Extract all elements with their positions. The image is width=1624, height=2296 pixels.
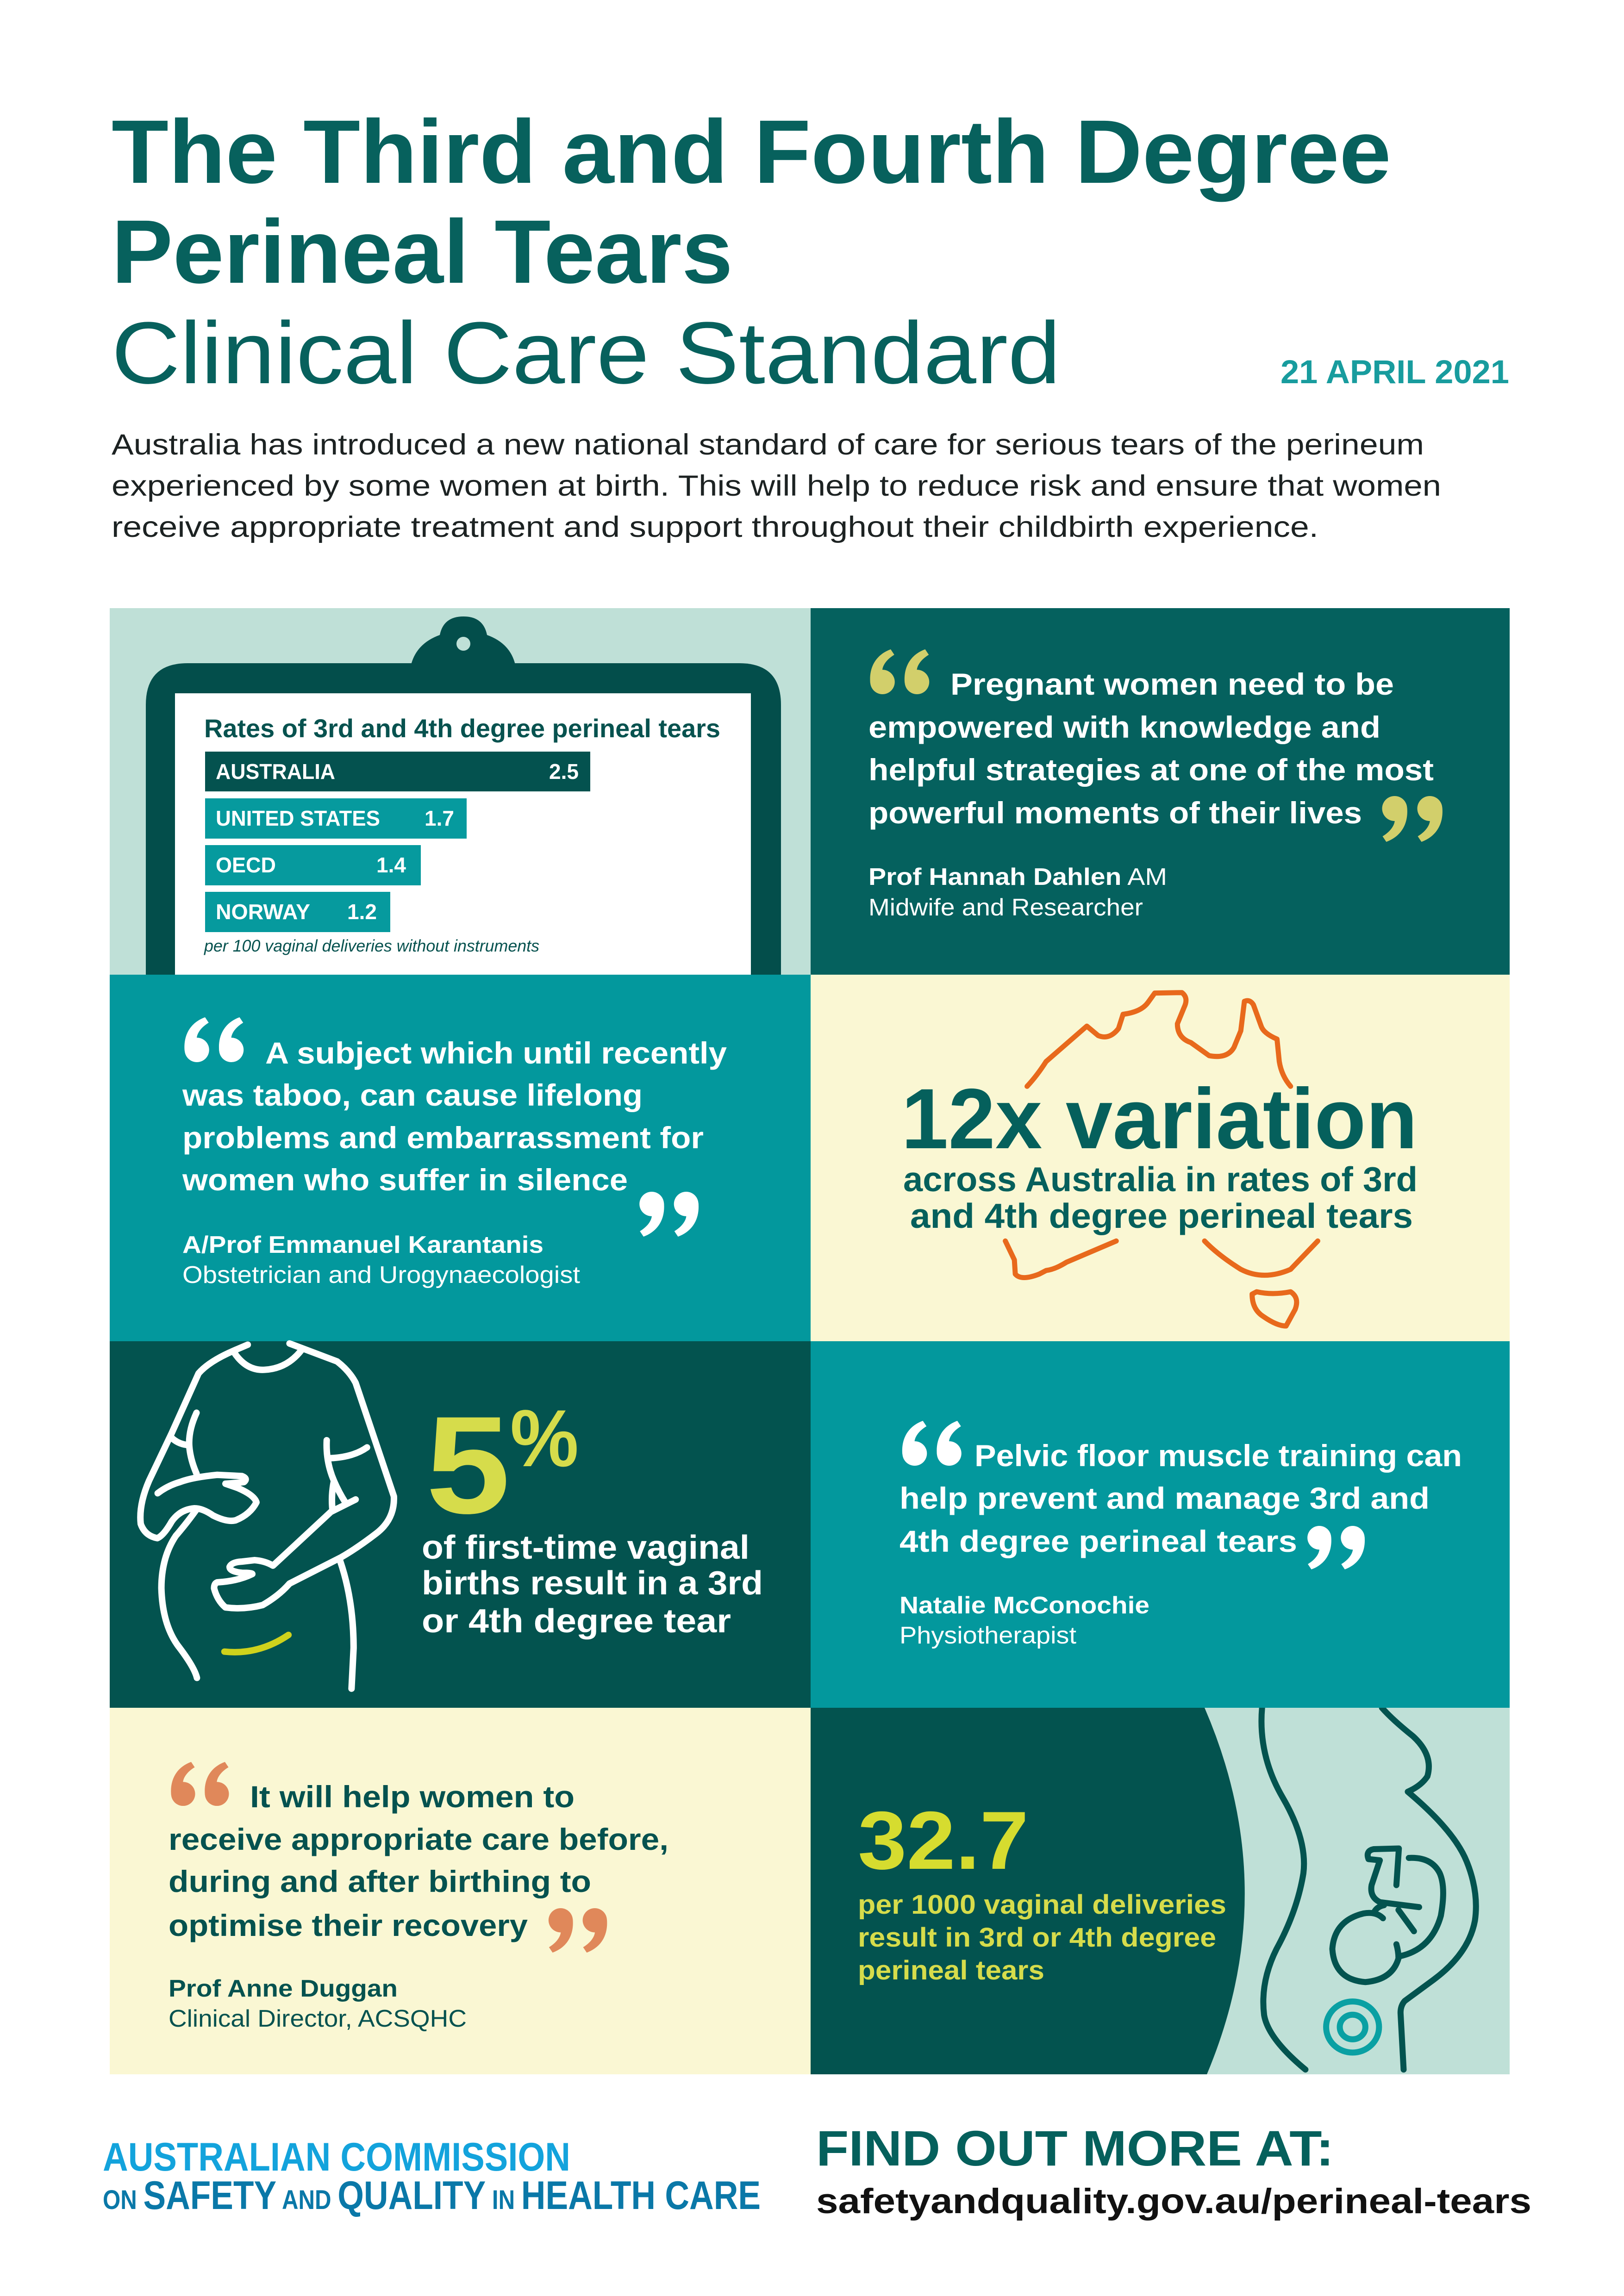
quote text: 4th degree perineal tears [899,1524,1297,1558]
quote text: empowered with knowledge and [868,710,1380,744]
stat caption: of first-time vaginal [422,1529,750,1566]
footnote: per 100 vaginal deliveries without instruments [204,936,539,955]
bar chart: OECD [216,853,276,877]
bar chart: 1.4 [376,853,406,877]
panel: quote Hannah Dahlen [811,608,1510,975]
icon: close quote [1307,1526,1365,1569]
call to action [816,2120,1531,2221]
title: Clinical Care Standard [112,304,1061,402]
bar chart [205,752,590,932]
icon: Australia map outline [1006,993,1318,1326]
quote text [169,1780,668,1942]
intro paragraph [112,429,1441,543]
icon: close quote [1382,796,1443,842]
logo: Australian Commission [103,2135,761,2218]
icon: pregnant belly with fetus [1262,1708,1476,2070]
quote text: help prevent and manage 3rd and [899,1481,1430,1515]
attribution: A/Prof Emmanuel Karantanis [182,1232,543,1258]
quote text: Pregnant women need to be [950,667,1394,701]
quote text: Pelvic floor muscle training can [974,1438,1462,1473]
intro paragraph: receive appropriate treatment and support throughout their childbirth experience. [112,511,1318,543]
quote text [182,1036,727,1197]
panel: quote McConochie [811,1341,1510,1708]
stat caption: perineal tears [858,1955,1044,1985]
intro paragraph: experienced by some women at birth. This will help to reduce risk and ensure that women [112,470,1441,502]
icon: open quote [902,1421,962,1466]
clipboard [146,616,781,975]
bar chart: 2.5 [549,759,579,784]
stat caption: result in 3rd or 4th degree [858,1923,1216,1953]
quote text: women who suffer in silence [182,1163,628,1197]
panel: quote Anne Duggan [110,1708,811,2074]
quote text: during and after birthing to [169,1864,591,1898]
big stat 5% [426,1387,579,1543]
title: Perineal Tears [112,201,733,302]
big stat: 12x variation [901,1071,1418,1167]
stat caption: per 1000 vaginal deliveries [858,1890,1226,1920]
call to action: safetyandquality.gov.au/perineal-tears [816,2182,1531,2221]
title [112,101,1391,402]
attribution: Natalie McConochie [899,1592,1149,1619]
panel: 5% stat [110,1341,811,1708]
quote text: optimise their recovery [169,1908,528,1942]
attribution [169,1975,467,2032]
icon: open quote [171,1762,229,1806]
bar chart: UNITED STATES [216,806,380,830]
intro paragraph: Australia has introduced a new national standard of care for serious tears of the perineum [112,429,1424,461]
stat caption: births result in a 3rd [422,1565,763,1602]
attribution: Physiotherapist [899,1622,1077,1649]
icon: open quote [184,1017,244,1062]
quote text [868,667,1434,830]
stat caption [903,1160,1418,1235]
attribution: Prof Hannah Dahlen AM [868,864,1167,890]
big stat 5%: % [510,1394,579,1484]
icon: open quote [870,649,929,694]
quote text: was taboo, can cause lifelong [182,1078,643,1112]
logo: Australian Commission: ON SAFETY AND QUALITY IN HEALTH CARE [103,2173,761,2218]
big stat 5%: 5 [426,1387,510,1543]
stat caption: and 4th degree perineal tears [910,1196,1413,1235]
icon: close quote [639,1192,699,1237]
bar chart: NORWAY [216,900,310,924]
big stat 32.7: 32.7 [858,1794,1029,1886]
bar chart: AUSTRALIA [216,759,335,784]
quote text [899,1438,1462,1558]
bar chart: 1.2 [347,900,377,924]
bar chart: 1.7 [425,806,454,830]
stat caption [858,1890,1226,1985]
panel: bar chart clipboard [110,608,811,975]
quote text: helpful strategies at one of the most [868,753,1434,787]
attribution [868,864,1167,921]
attribution [899,1592,1149,1649]
date: 21 APRIL 2021 [1280,354,1509,391]
panel: quote Karantanis [110,975,811,1341]
attribution: Prof Anne Duggan [169,1975,398,2002]
logo: Australian Commission: AUSTRALIAN COMMISSION [103,2135,570,2179]
panel: 32.7 stat [811,1708,1510,2074]
title: The Third and Fourth Degree [112,101,1391,202]
quote text: powerful moments of their lives [868,796,1362,830]
attribution: Clinical Director, ACSQHC [169,2005,467,2032]
stat caption: across Australia in rates of 3rd [903,1160,1418,1199]
attribution: Obstetrician and Urogynaecologist [182,1262,581,1288]
panel: 12x variation [811,975,1510,1341]
quote text: receive appropriate care before, [169,1822,668,1856]
attribution [182,1232,581,1288]
chart title: Rates of 3rd and 4th degree perineal tears [204,714,720,743]
stat caption [422,1529,763,1640]
attribution: Midwife and Researcher [868,894,1143,921]
icon: close quote [549,1908,607,1953]
quote text: It will help women to [250,1780,575,1814]
quote text: problems and embarrassment for [182,1120,704,1155]
stat caption: or 4th degree tear [422,1603,731,1640]
call to action: FIND OUT MORE AT: [816,2120,1334,2176]
icon: pregnant woman [140,1344,394,1689]
quote text: A subject which until recently [265,1036,727,1070]
